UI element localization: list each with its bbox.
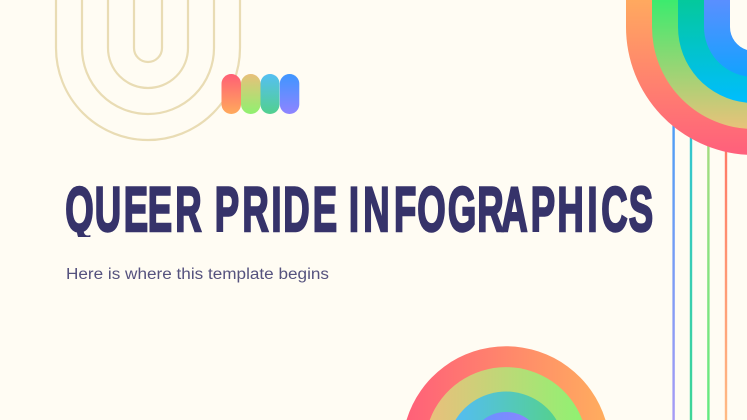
bottom rainbow arch [406,346,606,420]
rainbow colour pills [222,74,299,114]
title: QUEER PRIDE INFOGRAPHICS [65,174,653,244]
concentric U line decoration [56,0,240,140]
hanging vertical rainbow lines [672,125,727,420]
top-right rainbow arch [626,0,747,155]
subtitle: Here is where this template begins [66,266,329,283]
